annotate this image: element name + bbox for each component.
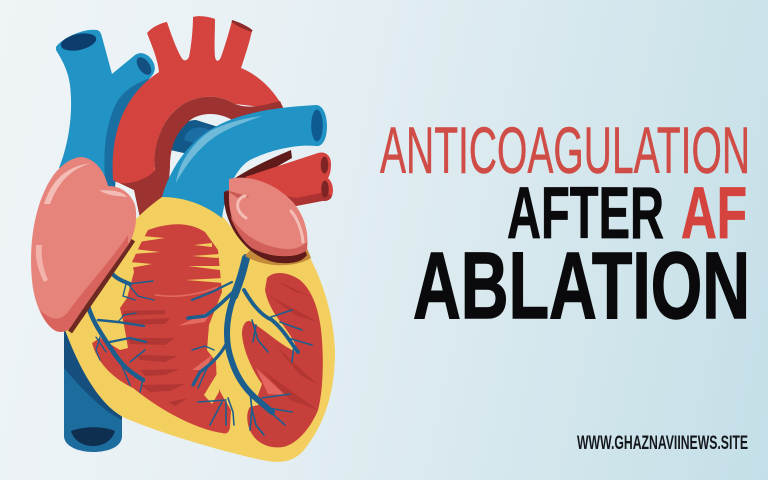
- inferior vena cava: [64, 320, 122, 452]
- heart body, yellow wall: [65, 196, 335, 462]
- aortic arch: [113, 16, 284, 218]
- coronary vessels, left: [86, 266, 154, 392]
- superior vena cava: [56, 30, 155, 195]
- illustration: anatomical heart: [31, 16, 335, 462]
- right atrium, upper right: [224, 178, 311, 265]
- myocardium: right chamber: [242, 273, 323, 447]
- left atrial appendage, pink: [31, 157, 136, 332]
- pulmonary veins, right: [232, 150, 333, 206]
- myocardium: left and septal chamber: [92, 224, 231, 433]
- pulmonary trunk behind the arch: [170, 120, 228, 160]
- coronary vessels, right: [188, 258, 312, 435]
- pulmonary artery, blue arc: [162, 105, 327, 218]
- title: After: AFTER: [507, 173, 664, 254]
